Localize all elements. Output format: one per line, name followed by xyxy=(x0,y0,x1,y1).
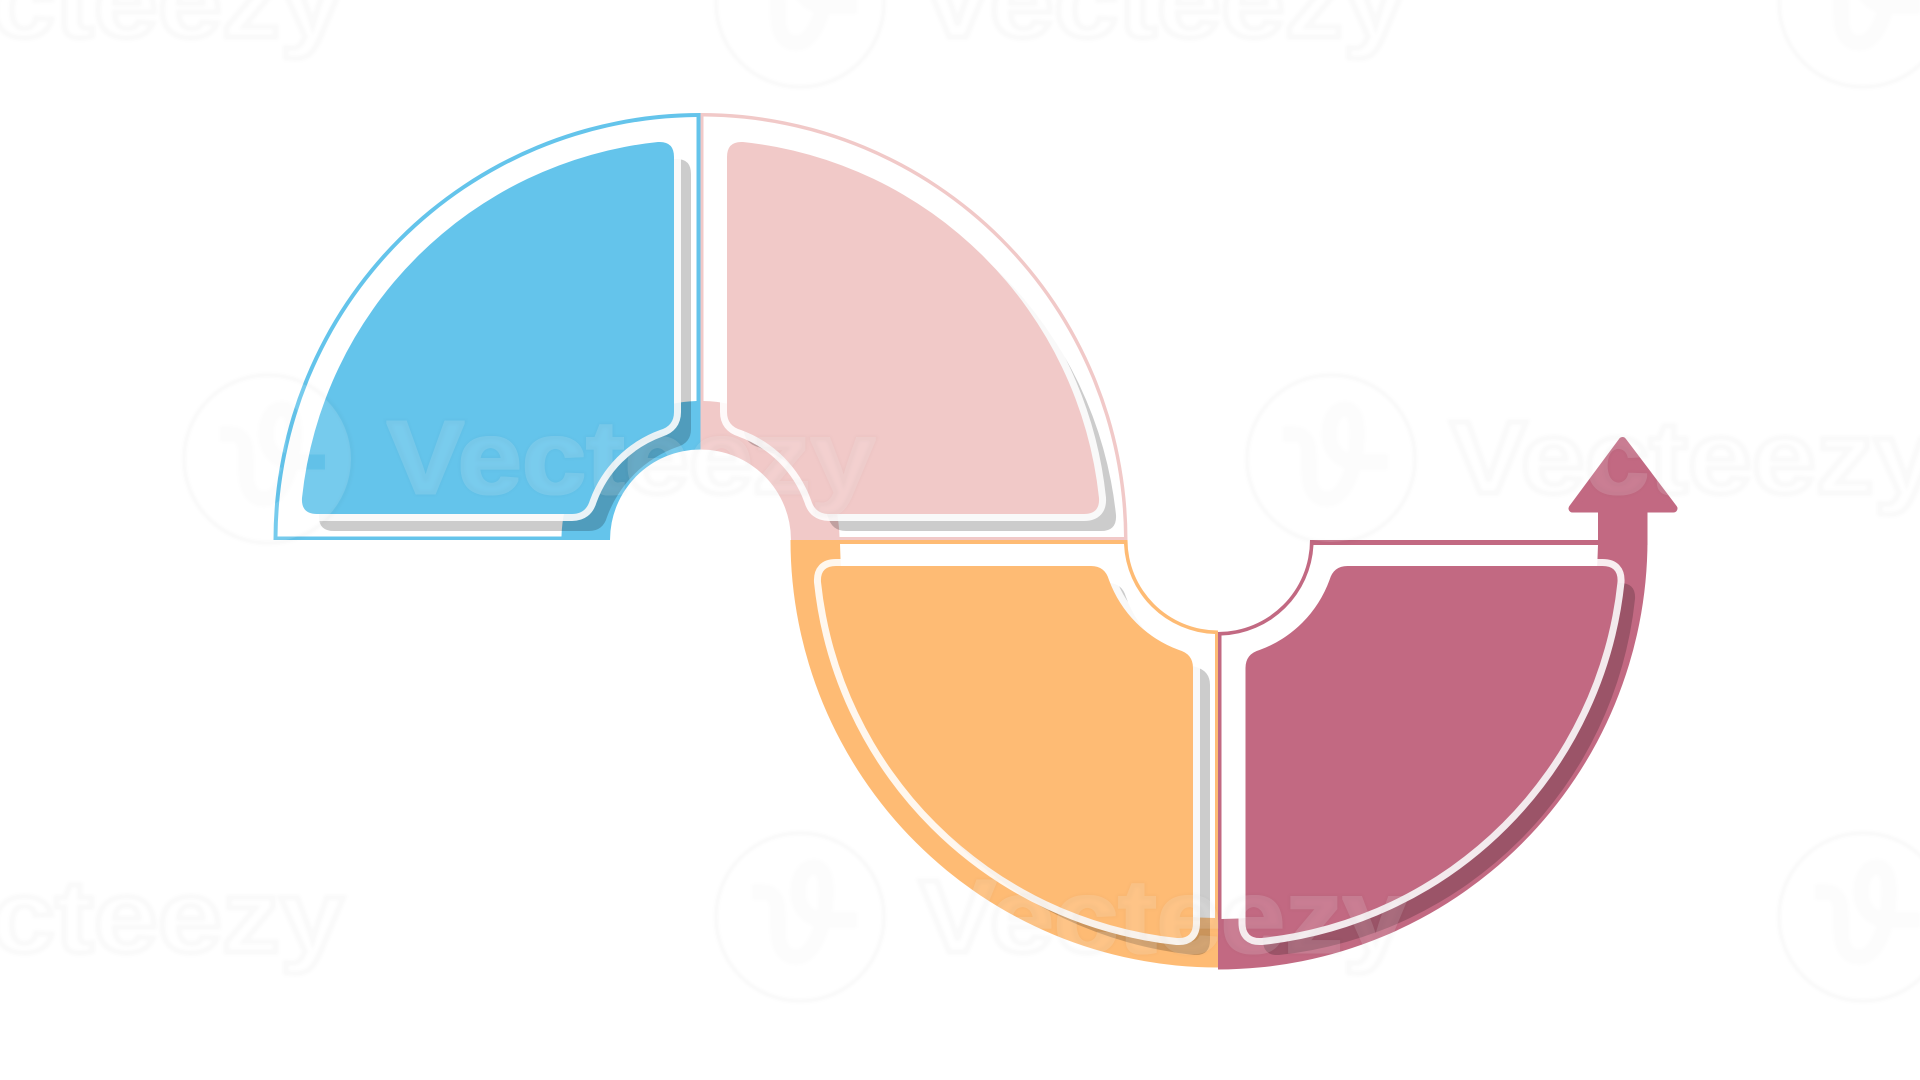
watermark: faint logo glyphs xyxy=(220,0,1920,957)
pink card fill xyxy=(727,142,1099,514)
maroon card shadow xyxy=(1263,583,1635,955)
arrow head xyxy=(1572,441,1674,508)
maroon card border xyxy=(1246,566,1618,938)
watermark: outlined wordmarks: Vecteezy xyxy=(919,859,1407,974)
orange card border xyxy=(821,566,1193,938)
watermark: wordmarks: Vecteezy xyxy=(387,400,875,515)
segment 2: pink quarter xyxy=(700,113,1128,540)
pink card shadow xyxy=(744,159,1116,531)
segment 4: maroon quarter xyxy=(1218,540,1648,970)
arrow: maroon arrowhead and shaft xyxy=(1572,441,1674,545)
watermark: outlined wordmarks: Vecteezy xyxy=(387,400,875,515)
segment 3: orange quarter xyxy=(790,540,1218,968)
pink ring base xyxy=(700,113,1128,540)
maroon white interior xyxy=(1222,545,1598,919)
maroon card fill xyxy=(1246,566,1618,938)
blue white interior xyxy=(278,117,696,536)
maroon ring base xyxy=(1218,540,1648,970)
blue card shadow xyxy=(319,159,691,531)
watermark: wordmarks: Vecteezy xyxy=(919,859,1407,974)
pink card border xyxy=(727,142,1099,514)
card: orange xyxy=(821,566,1210,955)
watermark: wordmarks: Vecteezy xyxy=(1450,400,1920,515)
watermark: outlined wordmarks: Vecteezy xyxy=(1450,400,1920,515)
blue card fill xyxy=(302,142,674,514)
blue card border xyxy=(302,142,674,514)
card: blue xyxy=(302,142,691,531)
card: pink xyxy=(727,142,1116,531)
orange ring base xyxy=(790,540,1218,968)
pink white interior xyxy=(704,116,1124,537)
orange white interior xyxy=(840,544,1215,918)
arrow shaft xyxy=(1598,505,1648,545)
orange card fill xyxy=(821,566,1193,938)
card: maroon xyxy=(1246,566,1635,955)
infographic canvas xyxy=(274,113,1678,970)
orange card shadow xyxy=(838,583,1210,955)
segment 1: blue quarter xyxy=(274,113,700,540)
watermark: logo discs xyxy=(274,384,1348,542)
blue ring base xyxy=(274,113,700,540)
